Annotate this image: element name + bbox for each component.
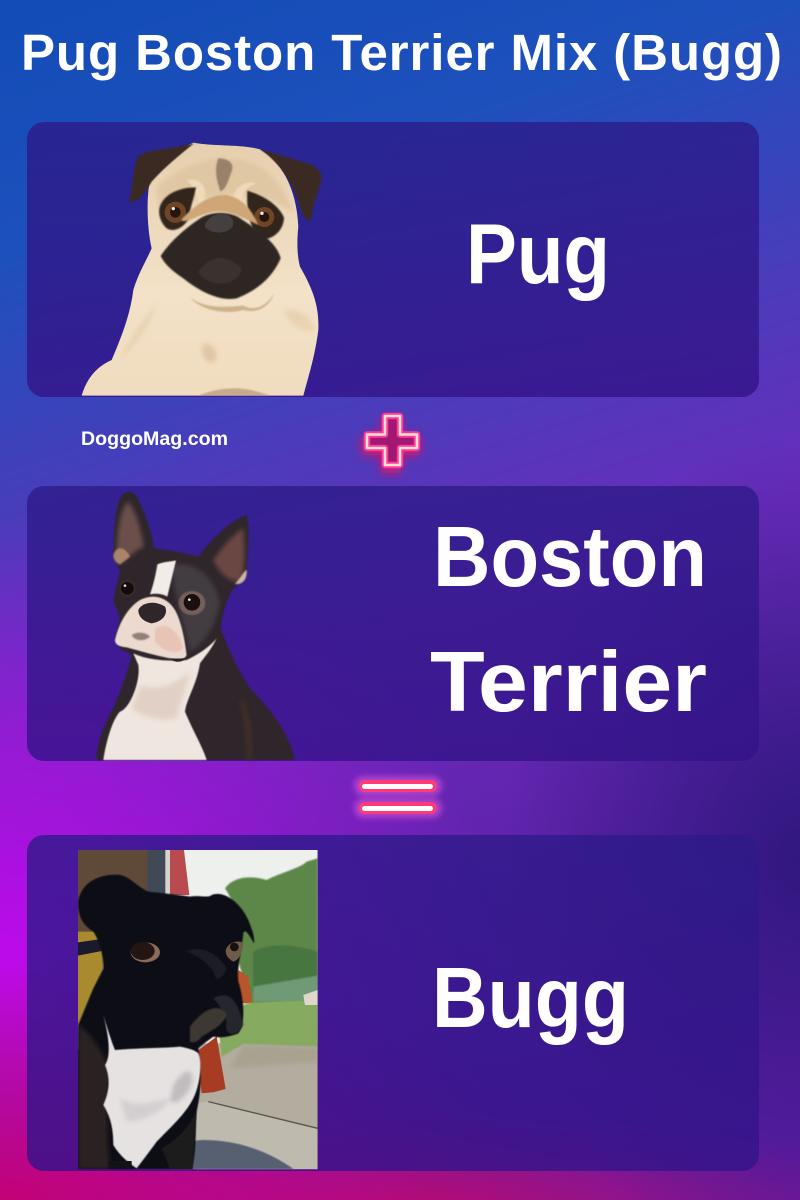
panel: boston terrier	[27, 486, 759, 761]
pug muzzle	[161, 213, 281, 299]
dog legs	[162, 1112, 196, 1169]
sky	[78, 850, 318, 1050]
grass	[217, 1000, 318, 1057]
chest shadow	[132, 672, 190, 720]
pug forehead	[157, 158, 293, 213]
white object	[303, 990, 318, 1005]
pug neck fold	[190, 293, 274, 312]
head sheen	[170, 564, 220, 652]
photo: boston terrier	[97, 492, 295, 760]
inner ears	[116, 502, 144, 563]
icon: neon plus	[362, 416, 420, 473]
pug nose wrinkle	[182, 195, 258, 225]
brindle left	[78, 1025, 110, 1169]
boston silhouette	[97, 492, 295, 760]
trees	[225, 858, 318, 1005]
white chest	[103, 1015, 200, 1168]
pug ears	[129, 143, 194, 203]
white blaze	[150, 560, 176, 597]
pug eyes	[165, 202, 186, 223]
photo: bugg	[78, 850, 318, 1169]
wall	[78, 850, 150, 933]
label: bugg: Bugg	[432, 951, 629, 1046]
label: pug: Pug	[466, 207, 610, 302]
panel: bugg	[27, 835, 759, 1171]
label: boston terrier: Boston	[433, 510, 707, 605]
pug body	[82, 143, 318, 396]
eyes	[119, 580, 136, 597]
pug chest shading	[198, 388, 270, 396]
yellow cushion	[78, 932, 103, 1025]
chin and neck white	[103, 638, 217, 760]
icon: neon equals	[354, 776, 442, 818]
concrete	[170, 1043, 318, 1169]
dog body	[78, 875, 254, 1169]
shed	[237, 970, 253, 1003]
dog eyes	[131, 942, 160, 962]
red post	[197, 1037, 226, 1093]
concrete lower slab	[197, 1102, 318, 1169]
panel: boston terrier: Terrier	[430, 635, 707, 730]
pug eye patches	[159, 187, 196, 230]
website credit: DoggoMag.com	[81, 429, 228, 450]
photo: pug	[82, 143, 322, 396]
jeans	[137, 1140, 294, 1169]
snout highlights	[187, 949, 227, 979]
brindle	[240, 698, 252, 760]
panel: pug	[27, 122, 759, 397]
title: Pug Boston Terrier Mix (Bugg)	[21, 24, 782, 81]
muzzle	[115, 597, 187, 660]
